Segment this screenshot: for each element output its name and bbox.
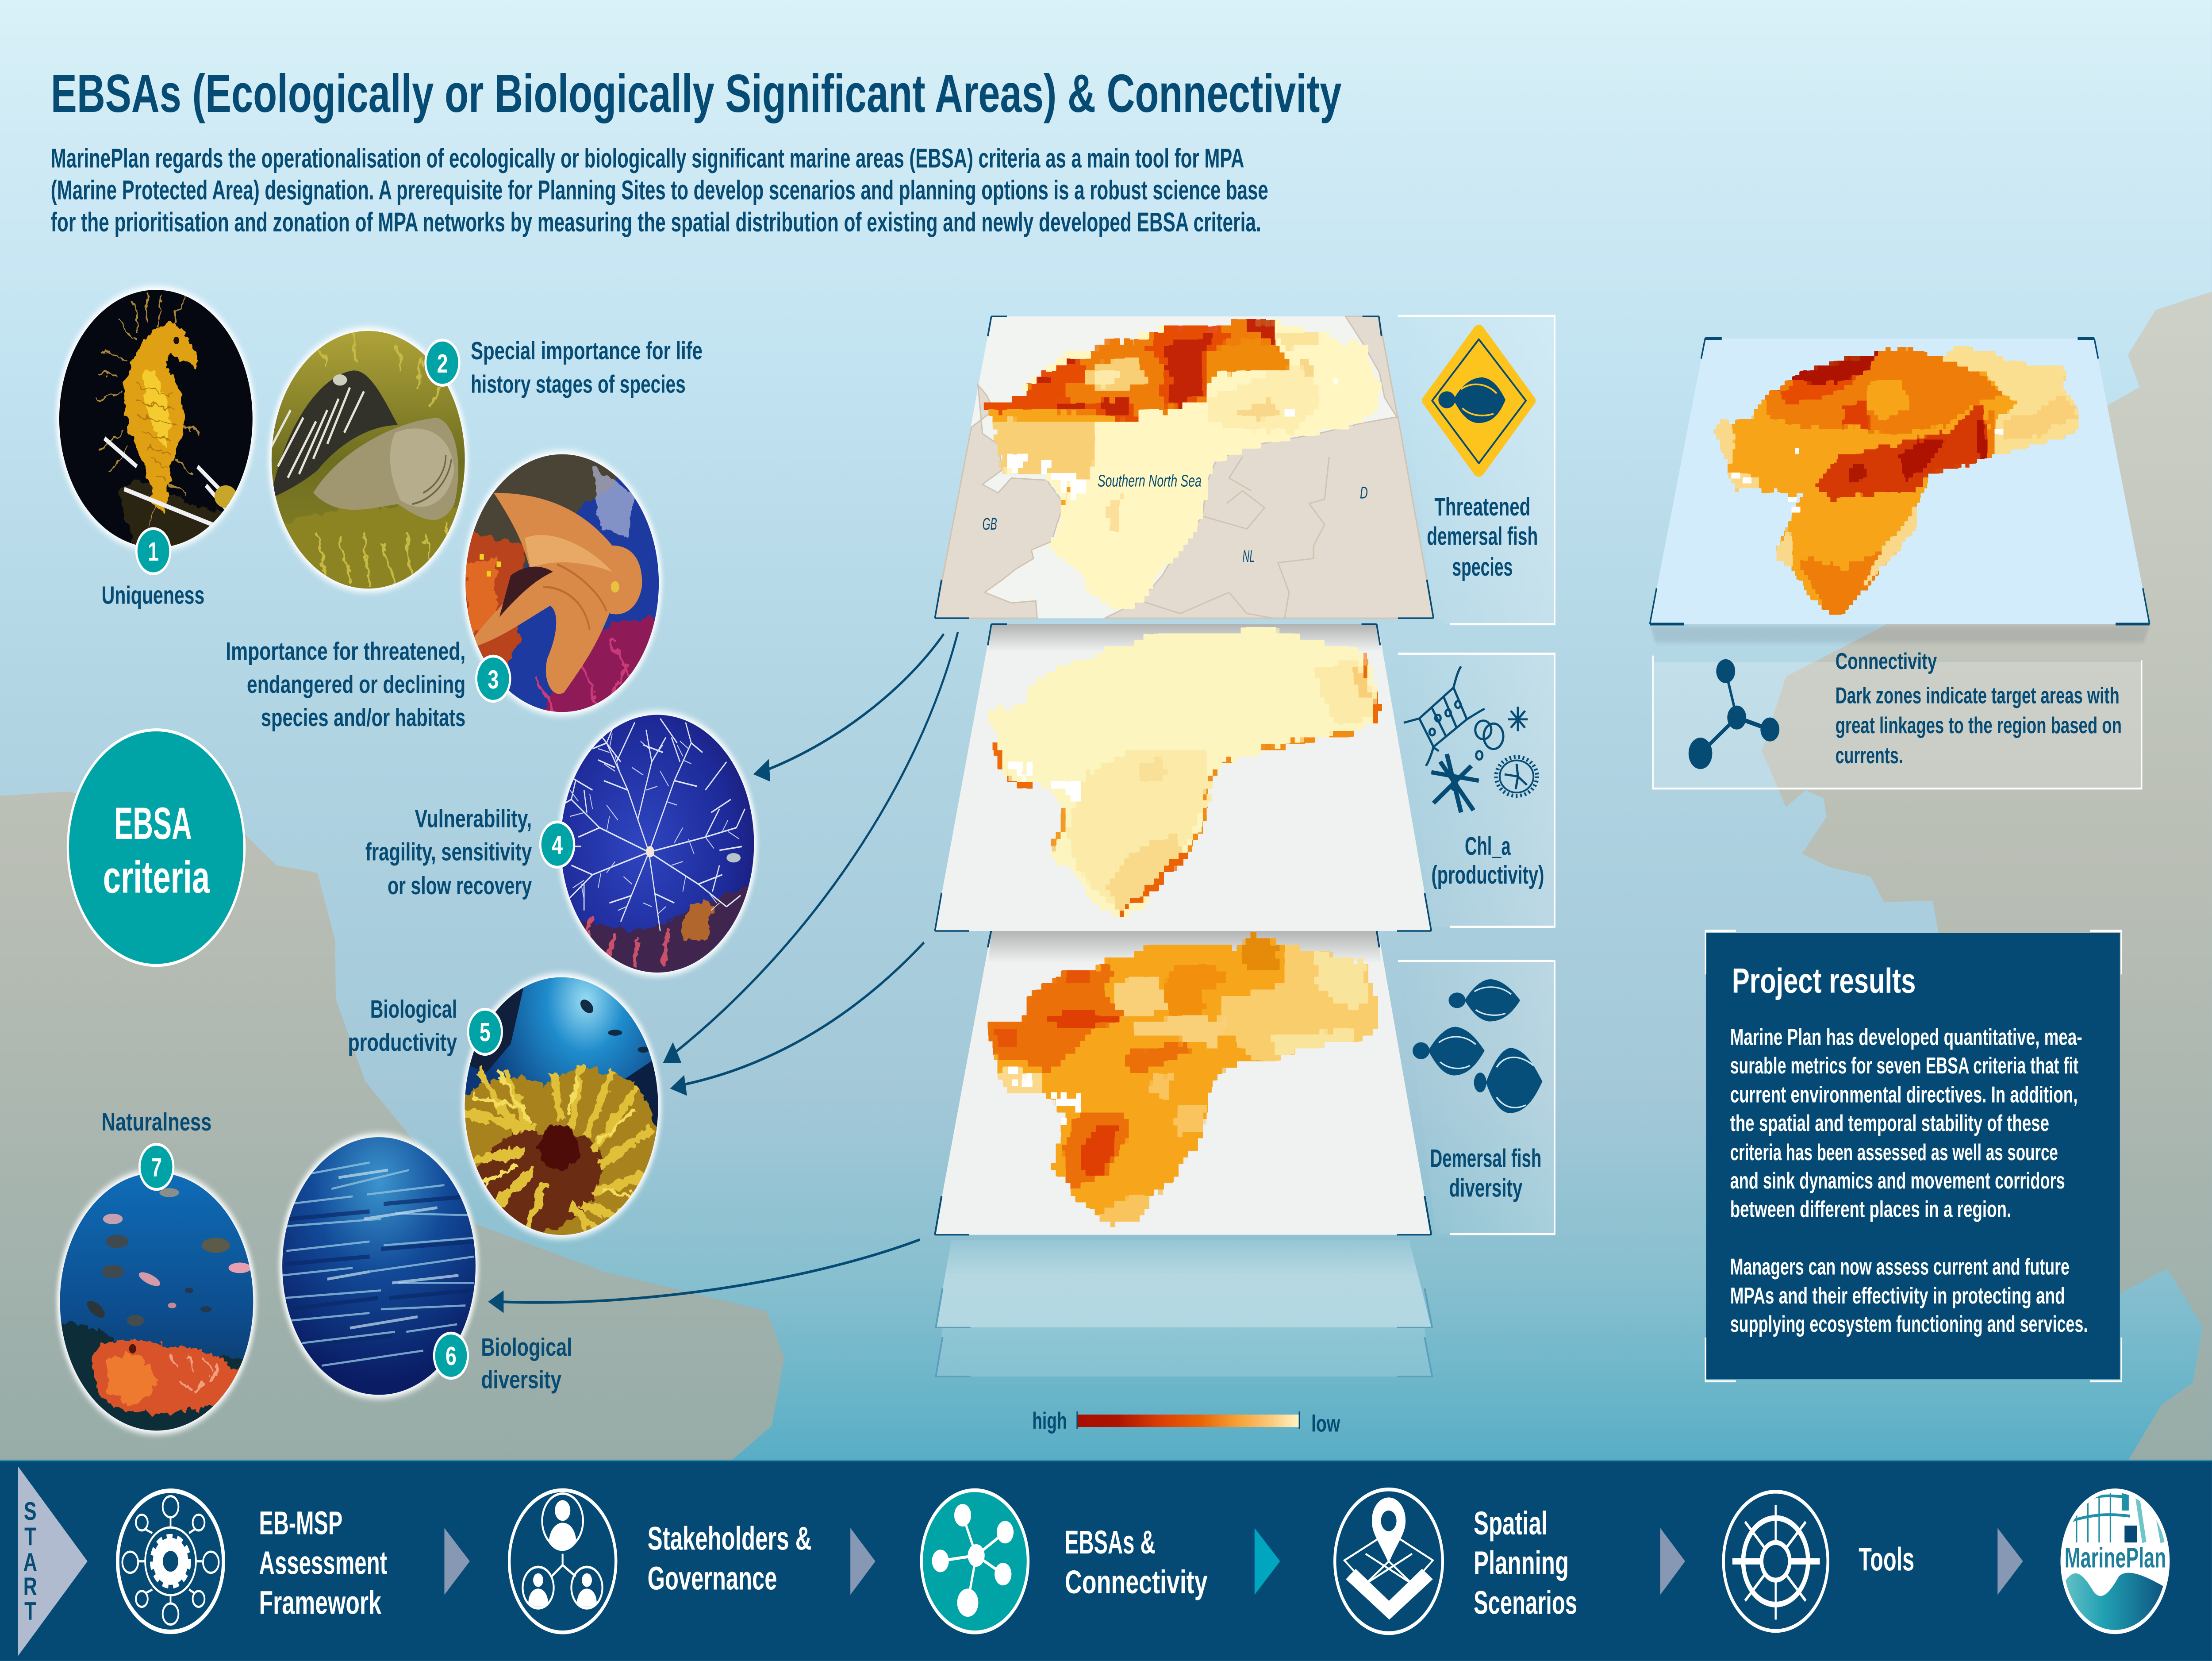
badge 3 and label: 3 — [488, 665, 499, 695]
photo 3: octopus — [460, 447, 664, 719]
project results body: criteria has been assessed as well as source — [1730, 1139, 2058, 1165]
connectivity map — [1650, 338, 2150, 643]
panel: chl_a productivity — [1398, 654, 1555, 927]
icon: three flatfish — [1413, 979, 1542, 1113]
footer navigation bar — [0, 1460, 2212, 1661]
icon: connectivity network — [1689, 659, 1779, 769]
project results body: the spatial and temporal stability of these — [1730, 1111, 2049, 1136]
map place labels: D — [1360, 484, 1368, 503]
icon: EB-MSP assessment framework — [118, 1491, 223, 1632]
badge 4 and label — [365, 804, 574, 900]
start arrow: R — [23, 1572, 37, 1601]
photo 6: barracuda school — [279, 1133, 480, 1401]
label: Tools: Tools — [1859, 1541, 1914, 1577]
label: EBSAs & Connectivity: EBSAs & — [1065, 1523, 1156, 1561]
badge 4 and label: 4 — [552, 830, 563, 860]
badge 2 and label — [426, 336, 703, 398]
label: EBSAs & Connectivity: Connectivity — [1065, 1563, 1208, 1600]
panel: chl_a productivity: (productivity) — [1431, 861, 1544, 889]
start arrow: A — [23, 1548, 37, 1576]
project results body: and sink dynamics and movement corridors — [1730, 1168, 2065, 1193]
map place labels: Southern North Sea — [1098, 471, 1202, 490]
badge 3 and label — [226, 637, 510, 731]
map place labels — [983, 471, 1368, 566]
map layer 3: demersal fish diversity — [935, 930, 1431, 1235]
chevron 5 — [1997, 1528, 2023, 1595]
legend: high to low colour scale — [1032, 1407, 1340, 1437]
badge 3 and label: species and/or habitats — [261, 703, 465, 731]
label: EBSAs & Connectivity — [1065, 1523, 1208, 1600]
project results body: between different places in a region. — [1730, 1196, 2011, 1222]
logo: MarinePlan: MarinePlan — [2065, 1542, 2166, 1573]
start arrow: S — [24, 1497, 37, 1526]
label: EB-MSP Assessment Framework: EB-MSP — [259, 1504, 342, 1541]
EBSA criteria circle: EBSA — [114, 798, 192, 849]
badge 5 and label: Biological — [370, 995, 457, 1023]
badge 4 and label: or slow recovery — [388, 871, 532, 900]
icon: fish warning sign — [1427, 330, 1530, 472]
photo 4: sea fan — [550, 711, 764, 989]
panel: threatened demersal fish species: demersal fish — [1427, 522, 1538, 550]
photo 5: yellow coral — [454, 973, 668, 1260]
panel: threatened demersal fish species: species — [1452, 553, 1513, 581]
project results body: supplying ecosystem functioning and services. — [1730, 1311, 2088, 1337]
badge 5 and label: productivity — [348, 1028, 457, 1056]
project results body: current environmental directives. In addition, — [1730, 1082, 2078, 1107]
photo 7: fish and scorpionfish — [51, 1169, 262, 1441]
badge 2 and label: 2 — [437, 349, 448, 378]
arrow: layer 2 to criterion 5 — [670, 942, 924, 1096]
panel: connectivity legend: Dark zones indicate target areas with — [1836, 683, 2120, 708]
project results body: Marine Plan has developed quantitative, mea- — [1730, 1024, 2082, 1050]
icon: EBSAs and connectivity (active) — [922, 1490, 1028, 1632]
label: Spatial Planning Scenarios: Scenarios — [1474, 1584, 1577, 1621]
badge 2 and label: Special importance for life — [471, 336, 703, 365]
panel: demersal fish diversity: Demersal fish — [1430, 1144, 1541, 1173]
badge 6 and label: 6 — [445, 1342, 457, 1371]
map place labels: GB — [983, 515, 997, 534]
label: Stakeholders & Governance: Governance — [648, 1560, 777, 1596]
EBSA criteria circle: criteria — [103, 852, 210, 903]
land: right coast — [1762, 292, 2212, 1461]
icon: tools ship wheel — [1724, 1492, 1828, 1631]
badge 4 and label: fragility, sensitivity — [365, 838, 532, 866]
legend: high to low colour scale: high — [1032, 1407, 1067, 1434]
badge 7 and label — [102, 1107, 211, 1189]
arrow: layer 1 to criterion 4 — [753, 634, 944, 781]
icon: stakeholders — [509, 1490, 616, 1632]
map place labels: NL — [1242, 547, 1255, 566]
panel: chl_a productivity: Chl_a — [1465, 832, 1511, 860]
intro text: MarinePlan regards the operationalisation of ecologically or biologically significant marine areas (EBSA) criteria as a main tool for MPA — [51, 143, 1244, 173]
badge 6 and label: diversity — [481, 1365, 561, 1394]
legend: high to low colour scale: low — [1311, 1410, 1340, 1437]
chevron 4 — [1660, 1528, 1685, 1595]
icon: plankton — [1404, 666, 1537, 812]
label: EB-MSP Assessment Framework: Assessment — [259, 1544, 387, 1581]
badge 6 and label: Biological — [481, 1333, 572, 1361]
panel: connectivity legend — [1653, 648, 2142, 788]
label: Spatial Planning Scenarios: Planning — [1474, 1544, 1569, 1581]
project results body — [1730, 1024, 2088, 1337]
intro text: (Marine Protected Area) designation. A prerequisite for Planning Sites to develop scenarios and planning options is a robust science base — [51, 175, 1268, 205]
chevron 3 active — [1255, 1528, 1280, 1595]
arrow: layer 1 to criterion 5 — [663, 632, 958, 1063]
badge 1 and label Uniqueness: Uniqueness — [102, 581, 204, 609]
photo 2: cuttlefish — [266, 324, 470, 596]
badge 2 and label: history stages of species — [471, 369, 686, 398]
badge 3 and label: endangered or declining — [247, 670, 465, 698]
badge 3 and label: Importance for threatened, — [226, 637, 465, 665]
arrow: layer 3 to criterion 6 — [488, 1240, 920, 1313]
badge 7 and label: Naturalness — [102, 1107, 211, 1136]
intro text: for the prioritisation and zonation of MPA networks by measuring the spatial distribution of existing and newly developed EBSA criteria. — [51, 208, 1261, 238]
panel: connectivity legend: great linkages to the region based on — [1836, 713, 2122, 738]
start arrow — [18, 1466, 88, 1656]
panel: threatened demersal fish species: Threatened — [1434, 492, 1530, 521]
map layer 2: chlorophyll productivity — [935, 624, 1431, 931]
land: left coast — [0, 792, 784, 1461]
label: EB-MSP Assessment Framework — [259, 1504, 387, 1621]
start arrow: T — [24, 1596, 36, 1625]
photo 1: seahorse — [57, 286, 255, 551]
panel: connectivity legend: currents. — [1836, 742, 1903, 768]
EBSA criteria circle — [68, 730, 245, 965]
chevron 1 — [444, 1528, 470, 1595]
panel: project results — [1705, 931, 2121, 1381]
chevron 2 — [850, 1528, 876, 1595]
badge 6 and label — [434, 1333, 572, 1394]
badge 1 and label Uniqueness: 1 — [148, 537, 159, 566]
ghost layer sheets — [936, 1240, 1432, 1376]
label: Stakeholders & Governance: Stakeholders & — [648, 1520, 812, 1557]
logo: MarinePlan — [2060, 1488, 2173, 1637]
badge 4 and label: Vulnerability, — [415, 804, 532, 833]
panel: demersal fish diversity — [1398, 961, 1555, 1234]
icon: spatial planning scenarios — [1335, 1489, 1443, 1633]
label: EB-MSP Assessment Framework: Framework — [259, 1584, 381, 1621]
title: EBSAs (Ecologically or Biologically Significant Areas) & Connectivity — [51, 63, 1342, 123]
project results body: Managers can now assess current and future — [1730, 1254, 2070, 1280]
badge 7 and label: 7 — [151, 1153, 162, 1182]
project results body: surable metrics for seven EBSA criteria that fit — [1730, 1053, 2078, 1078]
panel: connectivity legend: Connectivity — [1836, 648, 1937, 674]
label: Spatial Planning Scenarios: Spatial — [1474, 1504, 1548, 1542]
panel: demersal fish diversity: diversity — [1449, 1174, 1523, 1202]
map layer 1: threatened demersal fish species — [935, 316, 1433, 618]
start arrow: T — [24, 1522, 36, 1551]
project results heading: Project results — [1732, 961, 1916, 1000]
project results body: MPAs and their effectivity in protecting and — [1730, 1283, 2065, 1309]
label: Spatial Planning Scenarios — [1474, 1504, 1577, 1621]
label: Stakeholders & Governance — [648, 1520, 812, 1596]
badge 5 and label — [348, 995, 502, 1056]
badge 5 and label: 5 — [480, 1018, 491, 1047]
badge 1 and label Uniqueness — [102, 529, 204, 609]
panel: threatened demersal fish species — [1398, 316, 1555, 624]
intro text — [51, 143, 1268, 238]
